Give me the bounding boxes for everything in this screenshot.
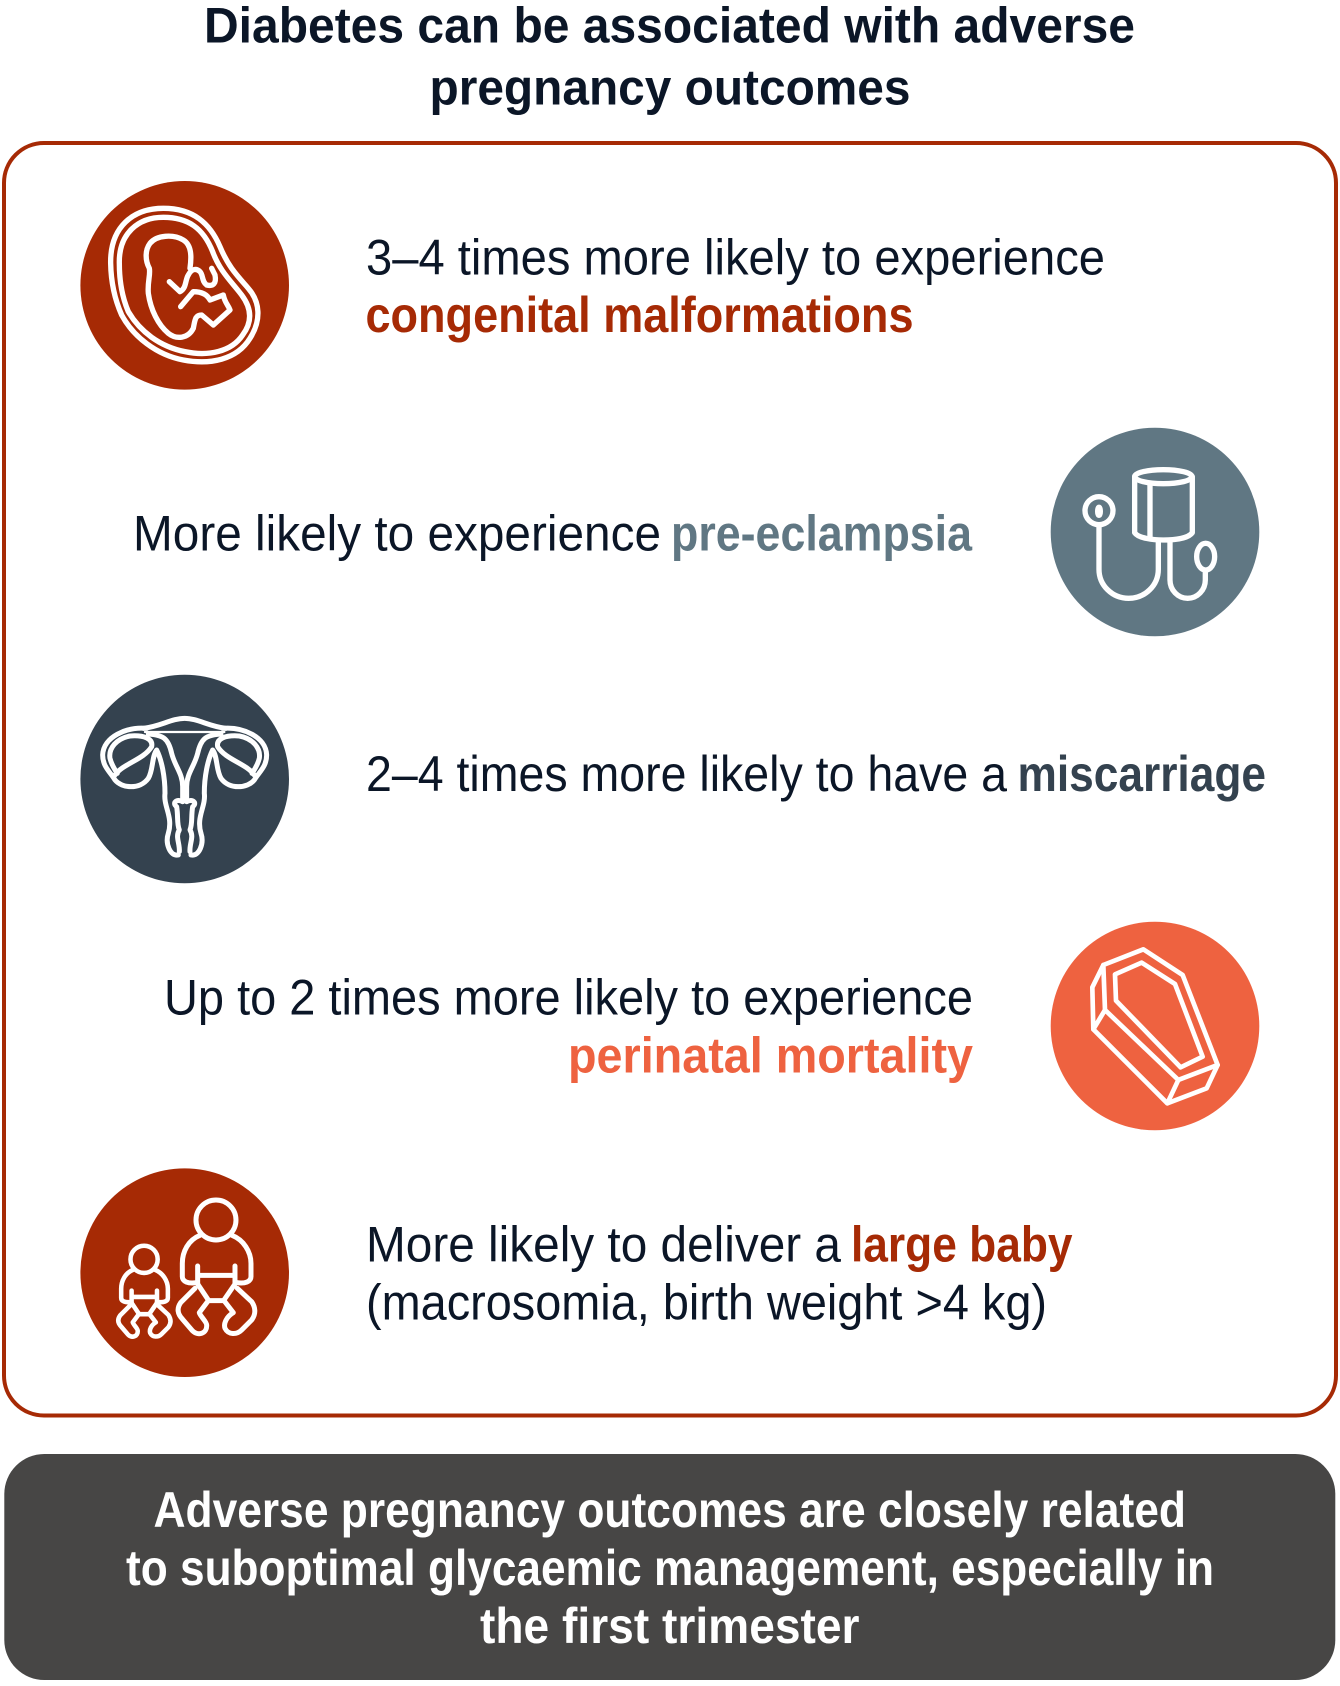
callout: glycaemic management: to suboptimal glycaemic management, especially in [126,1540,1214,1596]
text: miscarriage: 2–4 times more likely to have a [366,746,1007,802]
icon: uterus [80,675,289,883]
text: pre-eclampsia: pre-eclampsia [671,506,973,562]
text: congenital malformations [366,230,1105,343]
text: pre-eclampsia [133,506,973,562]
icon: blood pressure cuff [1051,428,1259,636]
text: large baby: (macrosomia, birth weight >4 kg) [366,1274,1047,1330]
text: large baby [366,1216,1073,1330]
text: perinatal mortality: Up to 2 times more likely to experience [164,970,973,1026]
icon: fetus in womb [80,181,289,390]
callout: glycaemic management: Adverse pregnancy outcomes are closely related [154,1482,1186,1538]
text: perinatal mortality: perinatal mortality [568,1028,973,1084]
callout: glycaemic management: the first trimester [480,1598,860,1654]
text: miscarriage: miscarriage [1018,746,1266,802]
text: large baby: More likely to deliver a [366,1216,841,1272]
text: perinatal mortality [164,970,973,1084]
callout: glycaemic management [4,1454,1335,1680]
text: congenital malformations: congenital malformations [366,287,914,343]
icon: two babies [80,1168,289,1377]
text: congenital malformations: 3–4 times more likely to experience [366,230,1105,286]
icon: coffin [1051,922,1259,1130]
panel: outcomes [4,143,1336,1416]
title: pregnancy outcomes [430,60,910,116]
text: large baby: large baby [851,1216,1073,1272]
text: pre-eclampsia: More likely to experience [133,506,661,562]
title [204,0,1135,116]
